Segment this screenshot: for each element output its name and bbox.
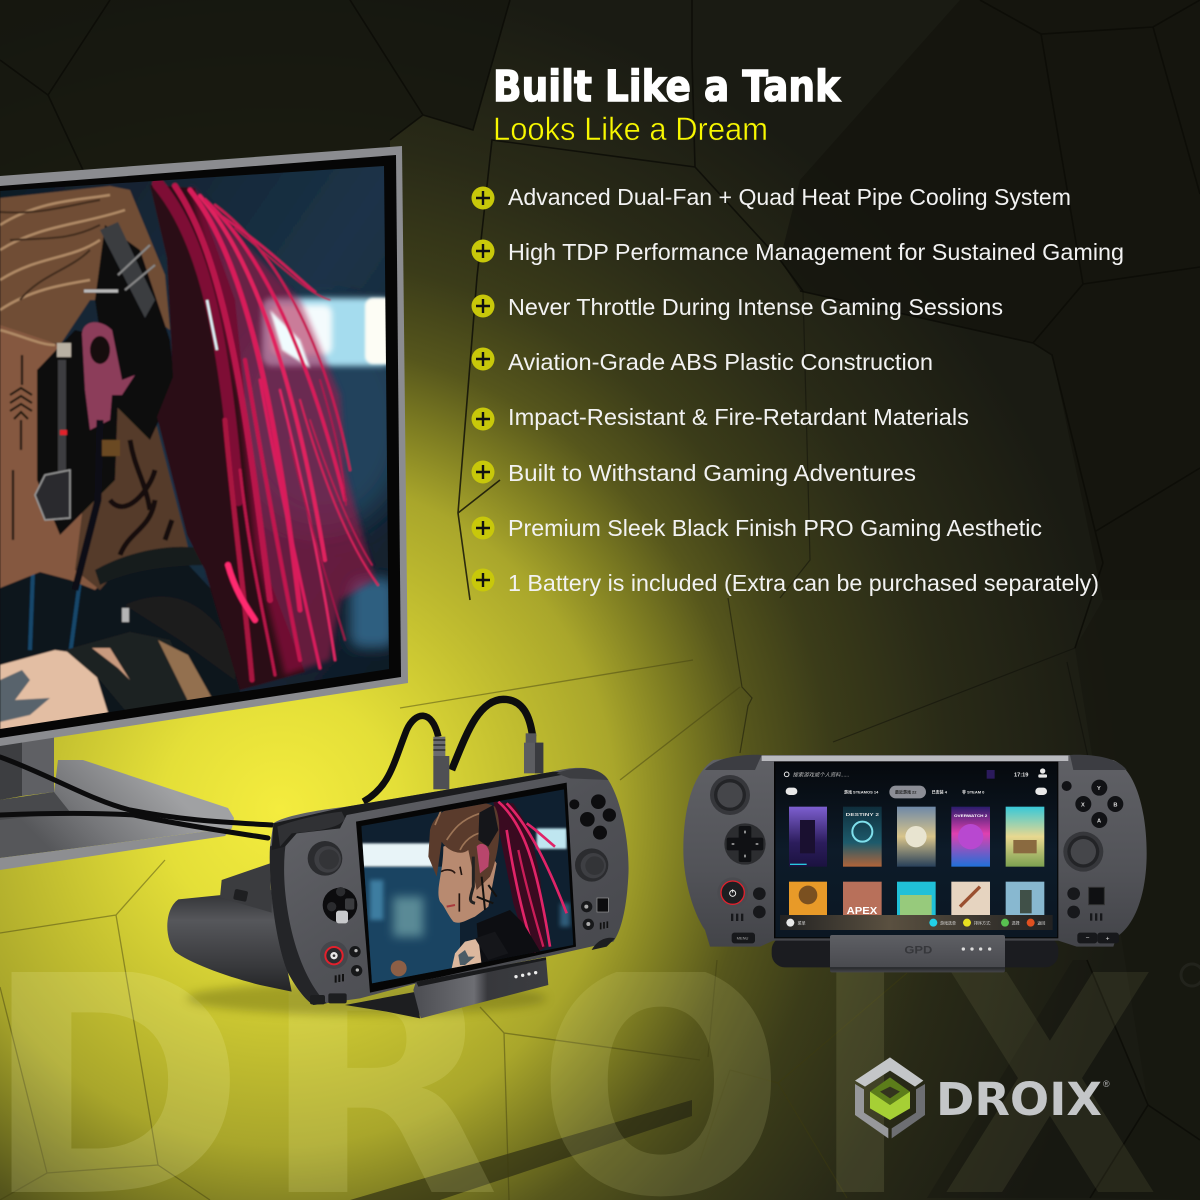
bottom hint bar: 返回: [1037, 919, 1045, 925]
feature 1: Advanced Dual-Fan + Quad Heat Pipe Cooling System: [508, 184, 1071, 210]
feature 8: 1 Battery is included (Extra can be purchased separately): [508, 570, 1099, 596]
ABXY buttons: A: [1097, 818, 1101, 824]
battery pack: [167, 890, 292, 992]
video and power cables: [363, 699, 533, 802]
underside: [772, 937, 1058, 967]
collar: [94, 546, 202, 585]
earpiece metal: [58, 360, 66, 500]
ABXY buttons: [1062, 780, 1123, 828]
black hair behind ear: [37, 330, 120, 535]
search bar: 搜索游戏或个人资料......: [793, 771, 850, 778]
heading: Built Like a Tank: Built Like a Tank: [493, 62, 841, 112]
bottom hint bar: 排序方式:: [974, 919, 991, 925]
screen bezel: [774, 762, 1058, 938]
console body: [270, 768, 629, 1005]
bottom hint bar: 游戏选单: [940, 919, 956, 925]
tattoo marks: [10, 355, 32, 540]
feature 5: Impact-Resistant & Fire-Retardant Materials: [508, 404, 969, 430]
right small buttons: [581, 898, 608, 930]
game tiles row 1: DESTINY 2: [846, 812, 880, 817]
ABXY buttons: B: [1113, 802, 1117, 808]
tabs: [786, 786, 1047, 798]
handheld on dock with battery, angled: [167, 699, 629, 1018]
handheld front view on dock: [683, 755, 1147, 972]
shoulder straps and arm: [0, 648, 110, 729]
tabs: 最近游戏 22: [895, 789, 917, 795]
cable connectors: [433, 733, 543, 789]
monitor stand: [0, 736, 234, 870]
logo icon: [855, 1057, 925, 1138]
dock: [345, 957, 548, 1018]
right small buttons: [1067, 887, 1119, 943]
right thumbstick: [1063, 832, 1103, 872]
right small buttons: +: [1106, 936, 1110, 943]
feature 4: Aviation-Grade ABS Plastic Construction: [508, 349, 933, 375]
lower bumpers: [310, 938, 615, 1004]
game art on screen: [360, 783, 577, 987]
feature 7: Premium Sleek Black Finish PRO Gaming Aesthetic: [508, 515, 1042, 541]
subheading: Looks Like a Dream: Looks Like a Dream: [493, 111, 768, 147]
carbon block: [220, 863, 272, 913]
dock: GPD: [904, 944, 932, 956]
game tiles row 2: APEX: [847, 906, 878, 917]
ABXY buttons: [569, 794, 616, 840]
bottom hint bar: [780, 915, 1053, 930]
skin neck: [0, 324, 98, 592]
tabs: 非 STEAM 0: [962, 789, 985, 795]
screen bezel: [356, 783, 576, 993]
game tiles row 1: OVERWATCH 2: [954, 813, 988, 818]
left thumbstick: [308, 841, 342, 876]
dark clothing: [0, 565, 240, 712]
left thumbstick: [710, 775, 750, 815]
cables from monitor to handheld: [0, 757, 272, 838]
power button: [717, 877, 748, 908]
dark hair mass: [150, 185, 305, 690]
body: [683, 755, 1147, 947]
right thumbstick: [575, 848, 608, 882]
tabs: 已安装 4: [932, 789, 948, 795]
headset band: [95, 225, 175, 440]
monitor screen: cyberpunk woman close-up: [0, 160, 410, 745]
monitor: [0, 146, 410, 746]
bottom hint bar: 选择: [1012, 919, 1020, 925]
left small buttons: MENU: [737, 935, 749, 940]
DROIX watermark: [0, 972, 1159, 1200]
power button: [320, 941, 348, 969]
game tiles row 2: [789, 882, 1044, 918]
DROIX logo: [855, 1057, 1110, 1138]
search bar: 17:19: [1014, 773, 1028, 779]
left small buttons: [336, 946, 362, 983]
pink hair body: [190, 185, 375, 675]
bottom hint bar: 菜单: [798, 919, 806, 925]
hair brown: [0, 186, 170, 345]
d-pad: [323, 887, 357, 923]
tabs: 游戏 STEAMOS 14: [844, 789, 879, 795]
launcher UI: [775, 763, 1057, 937]
pink hair strands: [158, 184, 378, 680]
game tiles row 1: [789, 807, 1044, 867]
feature 2: High TDP Performance Management for Sustained Gaming: [508, 239, 1124, 265]
dock: [830, 935, 1005, 972]
right small buttons: −: [1086, 935, 1090, 942]
pink ear clip: [82, 322, 135, 430]
left small buttons: [731, 887, 766, 943]
search bar: [784, 768, 1047, 779]
feature 6: Built to Withstand Gaming Adventures: [508, 460, 916, 486]
ABXY buttons: Y: [1097, 786, 1101, 792]
feature list: [472, 184, 1124, 596]
registered mark: ®: [1103, 1079, 1110, 1089]
ABXY buttons: X: [1081, 802, 1085, 808]
cast shadow: [187, 982, 547, 1015]
logo wordmark: DROIX: [936, 1073, 1102, 1126]
d-pad: [724, 823, 766, 865]
feature 3: Never Throttle During Intense Gaming Sessions: [508, 294, 1003, 320]
